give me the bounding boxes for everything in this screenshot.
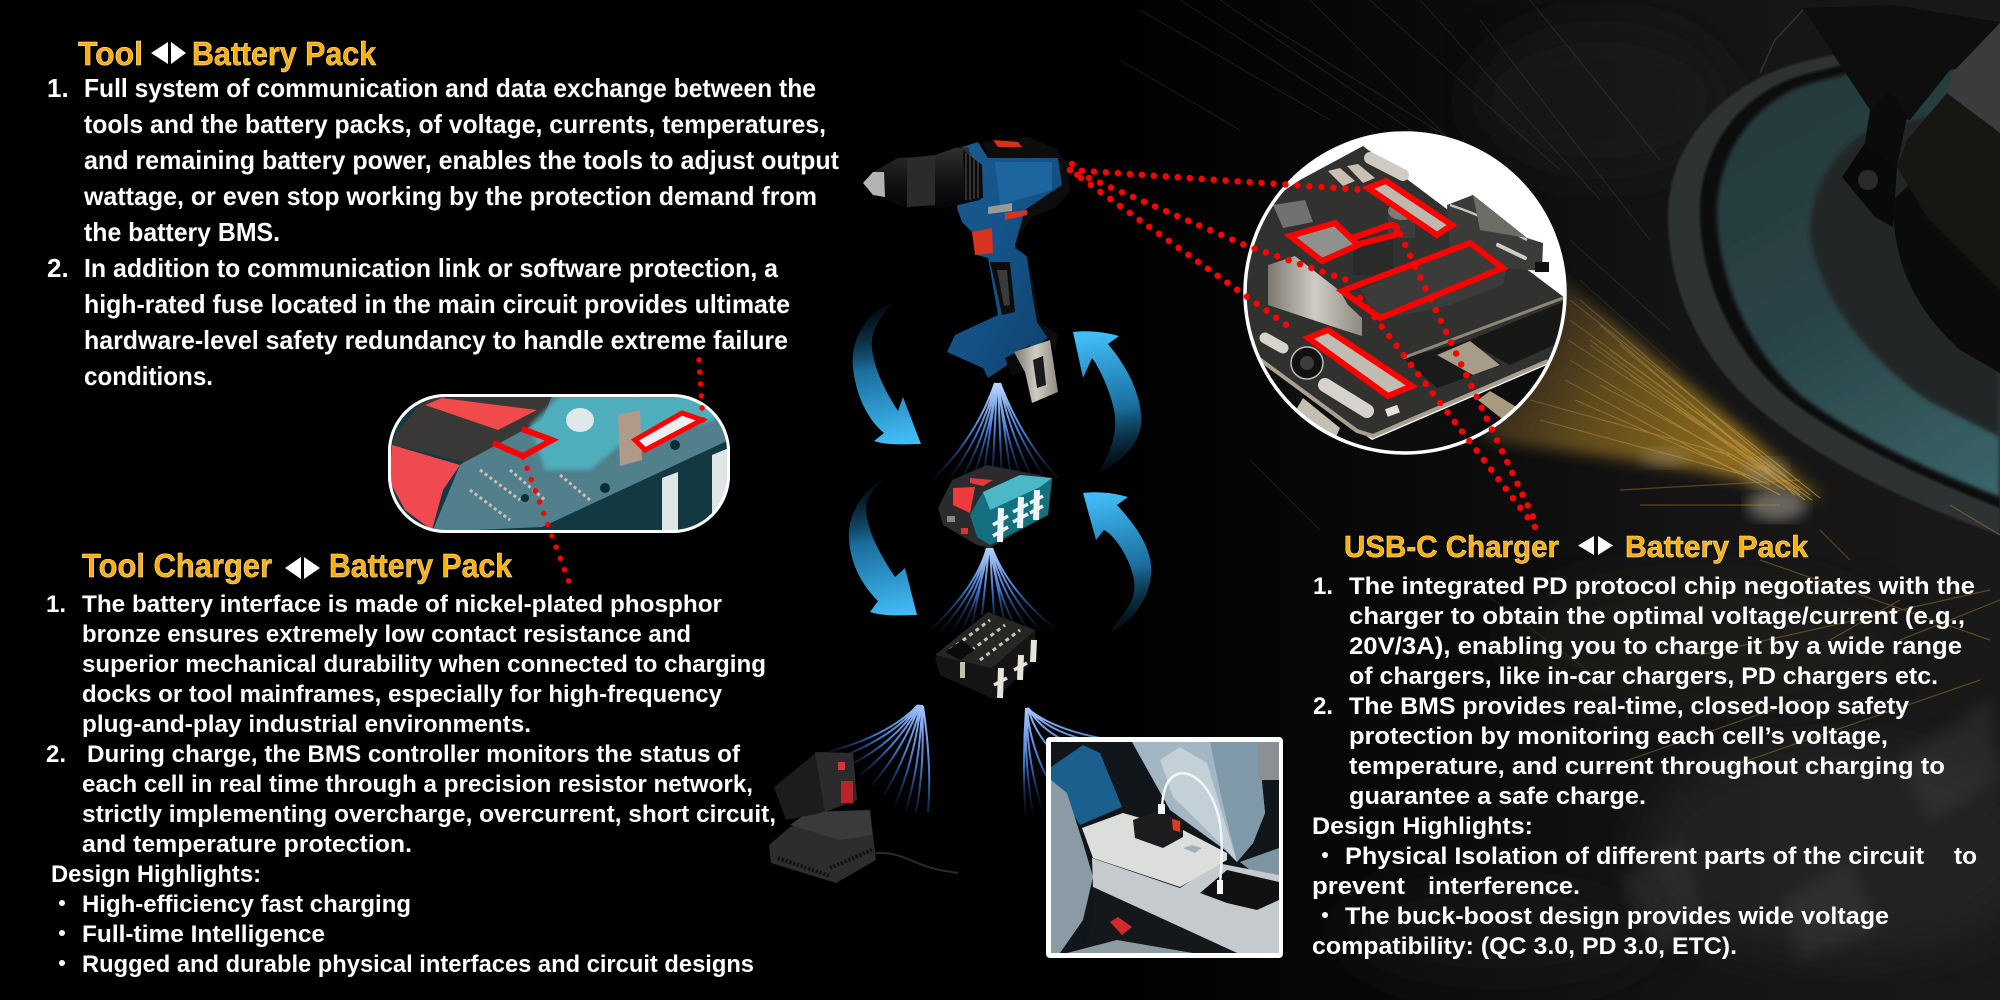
callout pill: battery pack inner detail <box>388 394 730 533</box>
battery pack <box>938 465 1052 548</box>
text block: USB-C Charger to Battery Pack: 20V/3A), enabling you to charge it by a wide range <box>1349 633 1962 660</box>
blue data rays: battery to cell pack <box>926 548 1054 634</box>
drill <box>863 137 1070 403</box>
text block: USB-C Charger to Battery Pack: temperature, and current throughout charging to <box>1349 753 1945 780</box>
text block: Tool to Battery Pack: wattage, or even stop working by the protection demand from <box>83 181 817 211</box>
red highlight boxes <box>1290 181 1503 396</box>
text block: USB-C Charger to Battery Pack: The integrated PD protocol chip negotiates with the <box>1349 573 1975 600</box>
text block: Tool Charger to Battery Pack: Design Highlights: <box>51 861 261 888</box>
text block: USB-C Charger to Battery Pack: 2. <box>1313 693 1333 720</box>
text block: Tool to Battery Pack <box>47 73 839 391</box>
text block: USB-C Charger to Battery Pack: The buck-boost design provides wide voltage <box>1345 903 1889 930</box>
text block: USB-C Charger to Battery Pack: to <box>1954 843 1977 870</box>
text block: Tool to Battery Pack: conditions. <box>84 361 213 391</box>
text block: USB-C Charger to Battery Pack: Physical Isolation of different parts of the circuit <box>1345 843 1924 870</box>
text block: USB-C Charger to Battery Pack: of chargers, like in-car chargers, PD chargers etc. <box>1349 663 1938 690</box>
text block: USB-C Charger to Battery Pack: compatibility: (QC 3.0, PD 3.0, ETC). <box>1312 933 1737 960</box>
spark glow <box>1480 277 1827 500</box>
heading: Tool to Battery Pack: Battery Pack <box>192 35 377 72</box>
photo: USB-C charging in a car <box>1046 737 1283 958</box>
text block: Tool to Battery Pack: high-rated fuse located in the main circuit provides ultimate <box>84 289 790 319</box>
heading: USB-C Charger to Battery Pack: USB-C Charger <box>1344 529 1559 564</box>
text block: Tool Charger to Battery Pack: The battery interface is made of nickel-plated phosphor <box>82 591 722 618</box>
tool charger with battery <box>769 752 958 883</box>
curved arrows between drill, battery and cell pack <box>849 303 1151 633</box>
text block: Tool Charger to Battery Pack: Full-time Intelligence <box>82 921 325 948</box>
text block: Tool to Battery Pack: hardware-level safety redundancy to handle extreme failure <box>84 325 788 355</box>
text block: USB-C Charger to Battery Pack: The BMS provides real-time, closed-loop safety <box>1349 693 1910 720</box>
text block: USB-C Charger to Battery Pack: protection by monitoring each cell’s voltage, <box>1349 723 1888 750</box>
text block: Tool to Battery Pack: tools and the battery packs, of voltage, currents, temperatures, <box>84 109 826 139</box>
heading: USB-C Charger to Battery Pack <box>1344 529 1809 564</box>
blue data rays: drill to battery <box>930 383 1058 485</box>
text block: Tool to Battery Pack: In addition to communication link or software protection, a <box>84 253 779 283</box>
text block: USB-C Charger to Battery Pack: guarantee a safe charge. <box>1349 783 1646 810</box>
text block: Tool to Battery Pack: the battery BMS. <box>84 217 280 247</box>
text block: Tool Charger to Battery Pack: Rugged and durable physical interfaces and circuit designs <box>82 951 754 978</box>
text block: Tool Charger to Battery Pack: strictly implementing overcharge, overcurrent, short circuit, <box>82 801 776 828</box>
fins and metal contacts on the board <box>1360 195 1543 320</box>
text block: USB-C Charger to Battery Pack: 1. <box>1313 573 1333 600</box>
red dotted leader lines from pill to headings <box>523 360 703 582</box>
text block: Tool Charger to Battery Pack: High-efficiency fast charging <box>82 891 411 918</box>
text block: USB-C Charger to Battery Pack: prevent <box>1312 873 1405 900</box>
blue data rays: cell pack to USB-C car charging <box>1024 708 1100 822</box>
text block: Tool to Battery Pack: 2. <box>47 253 69 283</box>
text block: USB-C Charger to Battery Pack: charger to obtain the optimal voltage/current (e.g., <box>1349 603 1965 630</box>
grinder disc outer rim <box>1668 30 2000 535</box>
text block: USB-C Charger to Battery Pack: Design Highlights: <box>1312 813 1533 840</box>
text block: Tool Charger to Battery Pack <box>46 591 776 978</box>
text block: Tool Charger to Battery Pack: 1. <box>46 591 66 618</box>
text block: Tool Charger to Battery Pack: and temperature protection. <box>82 831 412 858</box>
pads and components <box>1370 158 1403 175</box>
text block: Tool to Battery Pack: 1. <box>47 73 69 103</box>
text block: Tool Charger to Battery Pack: each cell in real time through a precision resistor network, <box>82 771 753 798</box>
text block: USB-C Charger to Battery Pack: interference. <box>1428 873 1580 900</box>
cell pack with BMS board <box>935 612 1037 700</box>
red dotted leader lines from drill to board and title <box>1070 164 1538 527</box>
text block: Tool Charger to Battery Pack: plug-and-play industrial environments. <box>82 711 531 738</box>
text block: Tool Charger to Battery Pack: bronze ensures extremely low contact resistance and <box>82 621 691 648</box>
debris at the bottom right <box>1620 700 2000 960</box>
text block: Tool Charger to Battery Pack: During charge, the BMS controller monitors the status of <box>87 741 741 768</box>
blue data rays: cell pack to tool charger <box>828 705 929 812</box>
heading: USB-C Charger to Battery Pack: Battery Pack <box>1625 529 1809 564</box>
text block: Tool to Battery Pack: and remaining battery power, enables the tools to adjust output <box>84 145 839 175</box>
heading: Tool to Battery Pack: Tool <box>78 35 143 72</box>
text block: Tool Charger to Battery Pack: 2. <box>46 741 66 768</box>
text block: Tool to Battery Pack: Full system of communication and data exchange between the <box>84 73 816 103</box>
grinder guard, bracket and body <box>1803 5 2000 120</box>
heading: Tool Charger to Battery Pack <box>82 547 513 584</box>
magnifier: BMS circuit board detail <box>1240 132 1570 470</box>
background photo: angle grinder and sparks <box>1120 0 2000 990</box>
heading: Tool Charger to Battery Pack: Battery Pack <box>329 547 513 584</box>
text block: Tool Charger to Battery Pack: docks or tool mainframes, especially for high-frequency <box>82 681 723 708</box>
heading: Tool Charger to Battery Pack: Tool Charger <box>82 547 272 584</box>
heading: Tool to Battery Pack <box>78 35 377 72</box>
text block: Tool Charger to Battery Pack: superior mechanical durability when connected to charging <box>82 651 766 678</box>
grinder disc teal band <box>1717 50 2000 497</box>
text block: USB-C Charger to Battery Pack <box>1312 573 1977 960</box>
